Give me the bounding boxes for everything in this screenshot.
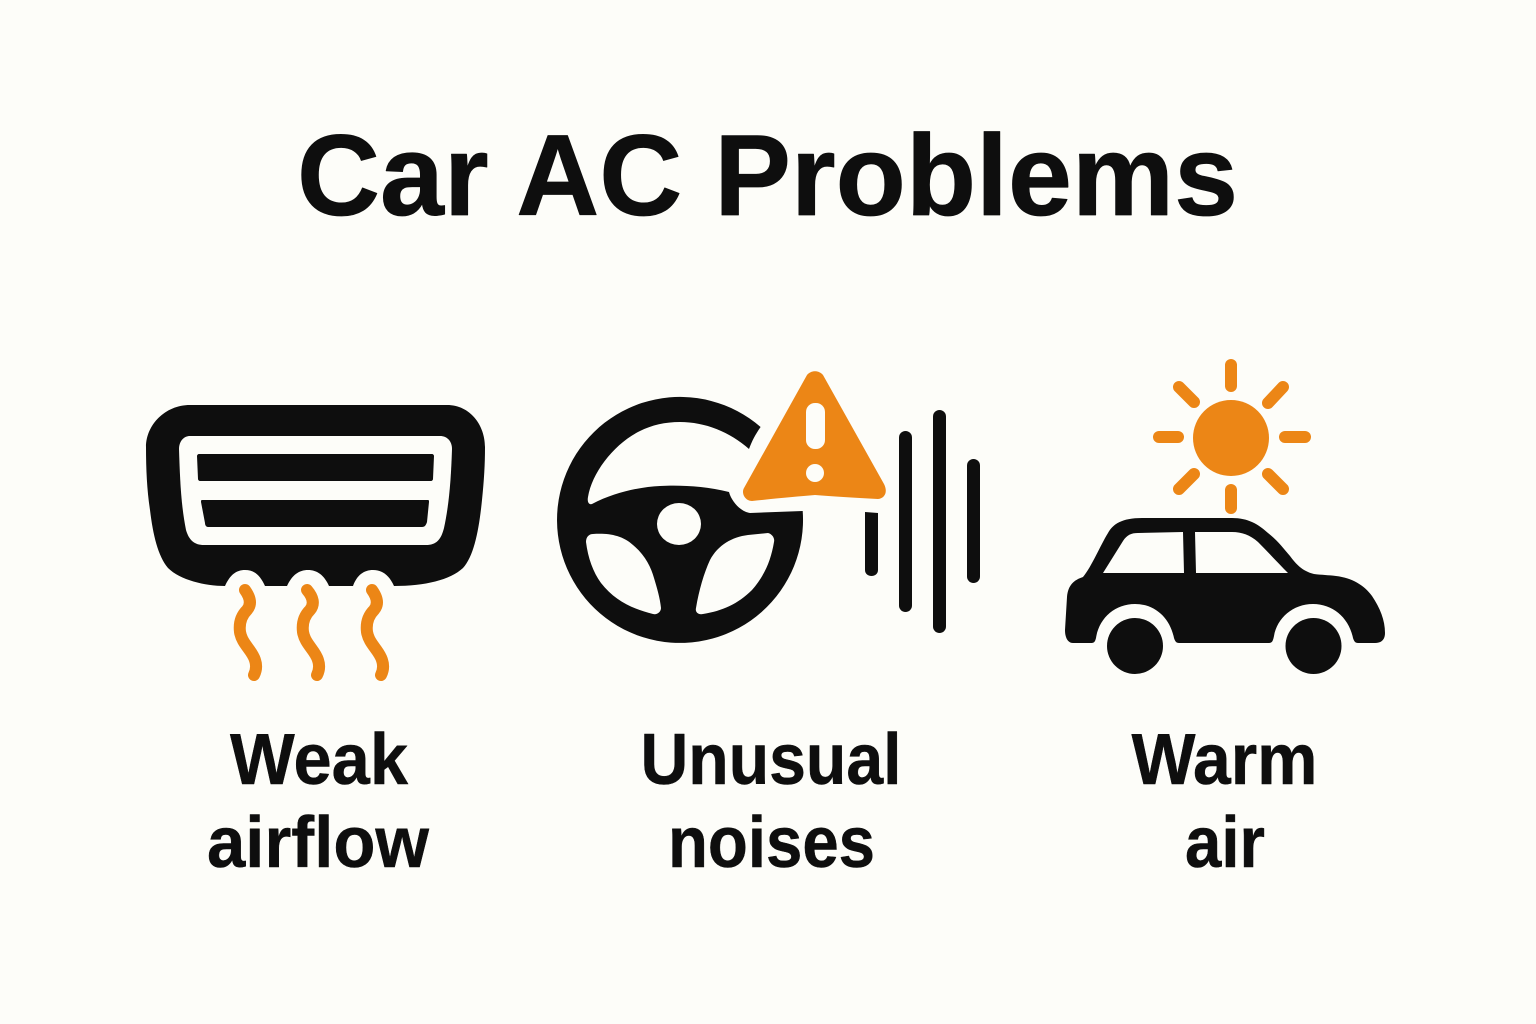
- title: Car AC Problems: [297, 112, 1238, 240]
- icon: steering wheel: [557, 397, 803, 643]
- label: weak airflow: Weak: [230, 720, 409, 800]
- icon: vibration lines: [865, 410, 980, 633]
- icon: warning triangle: [743, 371, 886, 501]
- airflow squiggles: [240, 590, 383, 675]
- label: unusual noises: [640, 720, 902, 883]
- label: warm air: [1132, 720, 1318, 883]
- label: weak airflow: airflow: [207, 803, 430, 883]
- label: unusual noises: noises: [668, 803, 875, 883]
- icon: car: [1065, 518, 1385, 674]
- label: warm air: Warm: [1132, 720, 1318, 800]
- icon: air vent with weak airflow: [146, 405, 485, 675]
- label: warm air: air: [1185, 803, 1265, 883]
- icon: sun: [1159, 365, 1305, 508]
- label: weak airflow: [207, 720, 430, 883]
- label: unusual noises: Unusual: [640, 720, 902, 800]
